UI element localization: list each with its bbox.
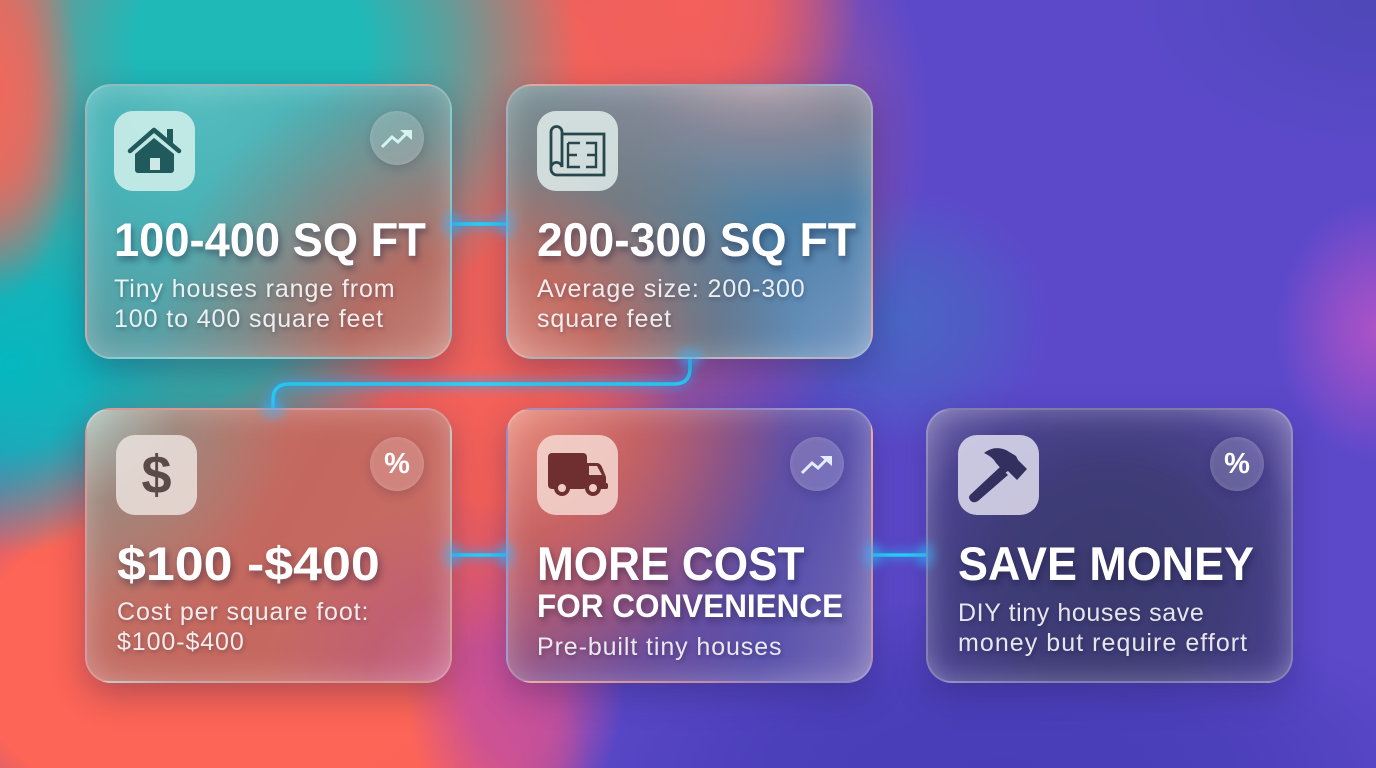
description: 100 to 400 square feet xyxy=(114,304,384,332)
panel: save money xyxy=(926,408,1293,683)
connector: convenience card to save money card xyxy=(873,546,926,564)
description: Average size: 200-300 xyxy=(537,275,806,303)
badge: trend arrow xyxy=(790,437,844,491)
icon: delivery truck xyxy=(537,435,618,515)
description: Cost per square foot: xyxy=(117,598,369,626)
subheading: FOR CONVENIENCE xyxy=(537,588,843,624)
badge: percent xyxy=(370,437,424,491)
description xyxy=(537,275,806,335)
icon: dollar sign xyxy=(116,435,197,515)
description: $100-$400 xyxy=(117,628,245,656)
description: square feet xyxy=(537,304,672,332)
icon: dollar sign: $ xyxy=(141,445,172,505)
badge: percent: % xyxy=(1224,448,1250,480)
connector: cost card to convenience card xyxy=(452,544,506,566)
panel: more cost for convenience xyxy=(506,408,873,683)
icon: hammer xyxy=(958,435,1039,515)
heading: SAVE MONEY xyxy=(958,537,1254,590)
description: Pre-built tiny houses xyxy=(537,633,782,661)
badge: percent xyxy=(1210,437,1264,491)
panel: 100-400 sq ft xyxy=(85,84,452,359)
panel: cost per square foot xyxy=(85,408,452,683)
badge: percent: % xyxy=(384,448,410,480)
connector: size card to average card xyxy=(452,213,506,235)
heading: MORE COST xyxy=(537,537,805,590)
description xyxy=(117,598,369,656)
description: money but require effort xyxy=(958,628,1248,656)
badge: trend arrow xyxy=(370,111,424,165)
heading: $100 -$400 xyxy=(117,537,380,590)
description: Tiny houses range from xyxy=(114,275,396,303)
panel: 200-300 sq ft xyxy=(506,84,873,359)
description xyxy=(114,275,396,334)
icon: house xyxy=(114,111,195,191)
heading: 200-300 SQ FT xyxy=(537,213,856,266)
connector: average card to cost card xyxy=(264,359,699,408)
heading: 100-400 SQ FT xyxy=(114,213,426,266)
description xyxy=(958,599,1248,656)
icon: floor plan xyxy=(537,111,618,191)
description: DIY tiny houses save xyxy=(958,599,1204,627)
